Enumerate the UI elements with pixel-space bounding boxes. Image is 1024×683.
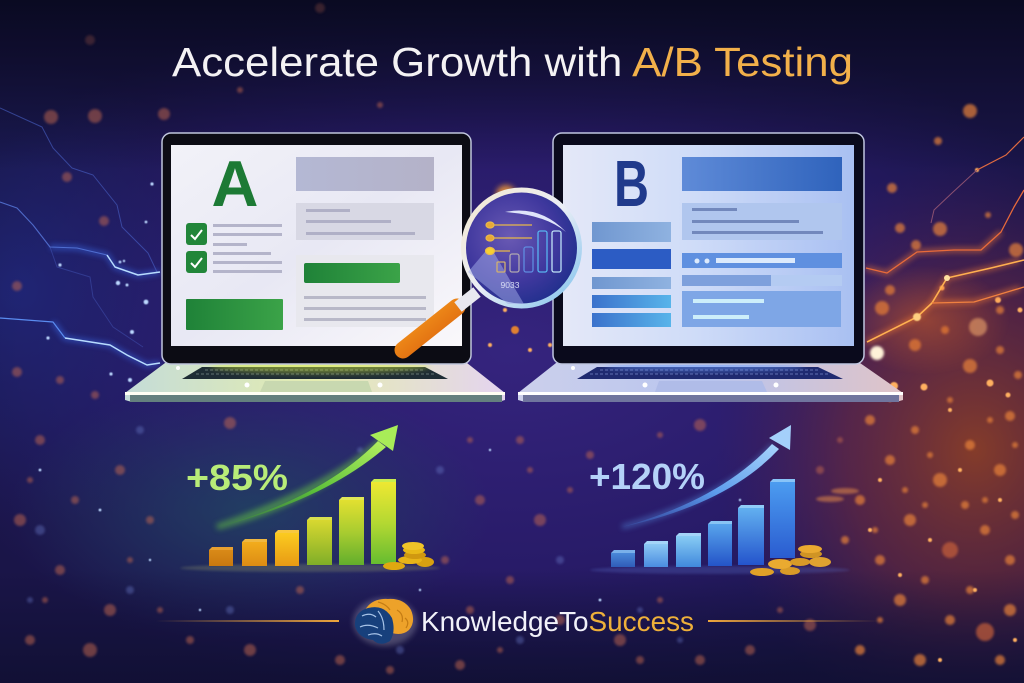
bars: [611, 479, 795, 567]
lens ring: [464, 190, 580, 306]
title: Accelerate Growth with A/B Testing: [172, 39, 853, 85]
content block: [682, 291, 841, 327]
left rule: [155, 620, 339, 622]
footer brand: [155, 598, 880, 646]
lightning: right orange bolts: [840, 137, 1024, 375]
letter B: B: [614, 147, 649, 220]
right rule: [708, 620, 880, 622]
brand name: KnowledgeToSuccess: [421, 606, 694, 637]
checklist: [186, 223, 282, 273]
text block: [682, 203, 842, 240]
header block: [296, 157, 434, 191]
lens small text: 9033: [501, 280, 520, 290]
brain logo: [353, 598, 417, 646]
growth arrow: [217, 425, 398, 527]
offer block: [296, 255, 434, 327]
label +120%: +120%: [589, 456, 705, 497]
nav bar: [682, 253, 842, 268]
magnifying glass: [403, 185, 580, 350]
speed streaks: [816, 488, 859, 502]
laptop A: [125, 133, 505, 402]
bars: [209, 479, 396, 566]
strip: [682, 275, 842, 286]
green button large: [186, 299, 283, 330]
chart A: +85% growth: [180, 425, 440, 572]
coins: [750, 545, 831, 576]
chart B: +120% growth: [589, 425, 859, 576]
label +85%: +85%: [186, 457, 288, 498]
laptop A base: [125, 359, 505, 402]
coins: [383, 542, 434, 570]
laptop A screen: [171, 145, 462, 346]
left option rows: [592, 222, 671, 327]
laptop B base: [518, 361, 903, 402]
growth arrow: [622, 425, 791, 527]
laptop B: [518, 133, 903, 402]
laptop B frame: [553, 133, 864, 364]
lightning: left blue bolts: [0, 108, 160, 365]
header block: [682, 157, 842, 191]
laptop A frame: [162, 133, 471, 364]
laptop B screen: [563, 145, 854, 346]
lens content: [468, 211, 566, 304]
text block: [296, 203, 434, 240]
handle: [403, 292, 477, 350]
letter A: A: [212, 147, 258, 220]
